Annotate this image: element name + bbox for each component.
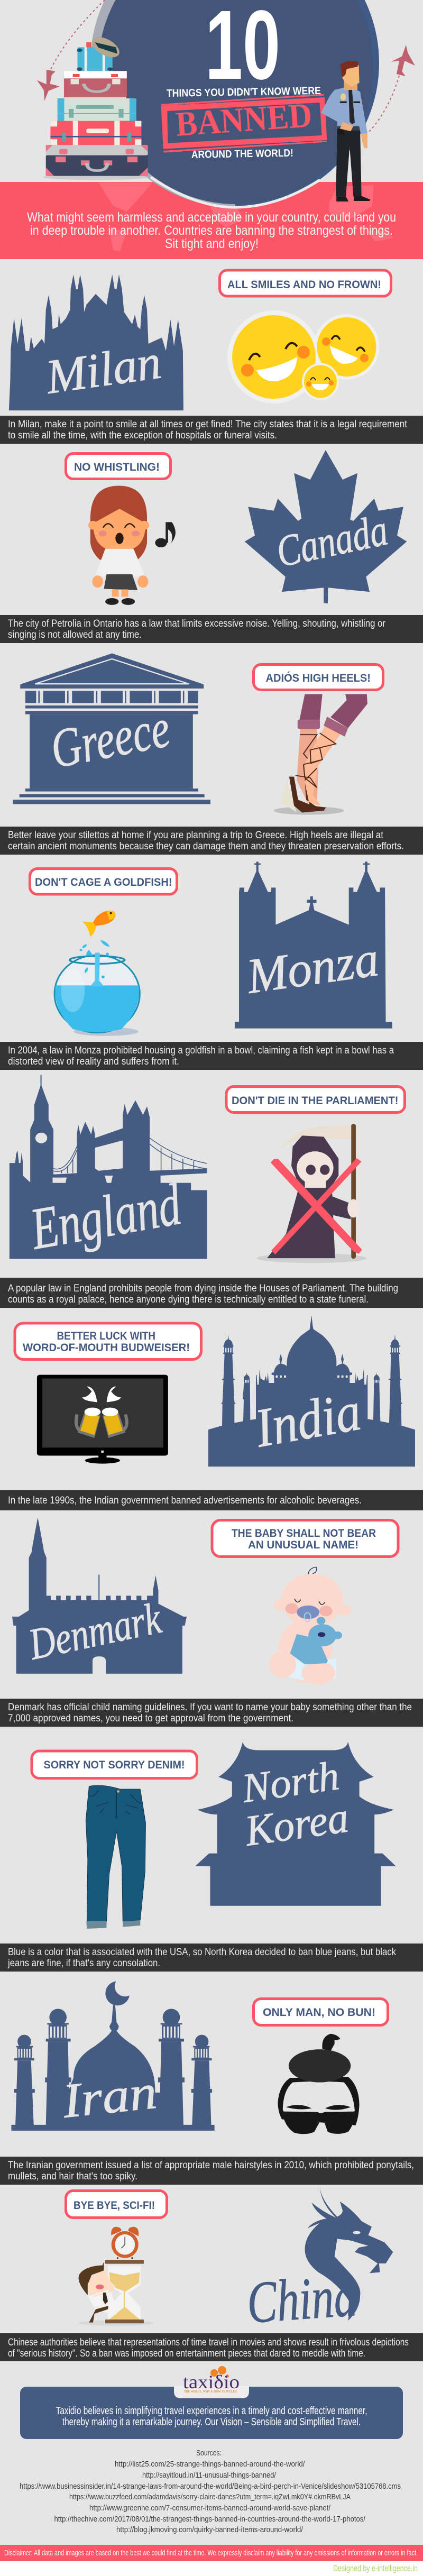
panel: Greece [0,653,423,855]
callout: DON'T CAGE A GOLDFISH! [35,876,172,888]
background circle [90,0,379,207]
silhouette: pagoda: Korea [242,1793,352,1855]
intro text: Sit tight and enjoy! [165,236,259,251]
silhouette: pagoda [195,1741,396,1906]
green suitcase [58,98,136,121]
callout [15,1323,201,1359]
caption bar: singing is not allowed at any time. [8,629,142,640]
about text [56,2405,367,2428]
mauve suitcase [64,71,127,98]
designer credit [0,2561,423,2576]
silhouette: Milan cathedral [9,274,183,410]
caption bar [0,2333,423,2361]
caption bar [0,827,423,855]
caption bar [0,1944,423,1972]
faint world map [98,182,392,251]
callout [32,1751,197,1778]
panel: England [0,1075,423,1308]
callout: SORRY NOT SORRY DENIM! [43,1759,185,1771]
callout: BYE BYE, SCI-FI! [73,2199,155,2212]
caption bar: Better leave your stilettos at home if you are planning a trip to Greece. High heels are illegal at [8,830,384,841]
silhouette: London skyline: England [25,1171,186,1262]
minarets [15,2060,34,2125]
silhouette: Greek temple: Greece [45,698,174,780]
silhouette: London skyline [10,1075,207,1262]
panel: header [0,0,423,259]
intro text [27,210,396,251]
callout: BETTER LUCK WITH [57,1330,155,1342]
panel: North Korea [0,1741,423,1972]
sources: http://list25.com/25-strange-things-banned-around-the-world/ [115,2460,305,2469]
caption bar: jeans are fine, if that's any consolation. [7,1958,160,1969]
icon: plane left [37,70,60,101]
caption bar: mullets, and hair that's too spiky. [8,2171,137,2182]
silhouette: pagoda: North [238,1752,342,1811]
icon: smileys [227,310,380,404]
sources: http://sayitloud.in/11-unusual-things-banned/ [142,2471,277,2480]
sources: https://www.buzzfeed.com/adamdavis/sorry-claire-danes?utm_term=.iqZwLmk0Y#.okmRBvLJA [69,2493,351,2501]
caption bar [0,615,423,643]
panel: Monza [0,861,423,1070]
panel: India [0,1315,423,1510]
panel: China [0,2187,423,2361]
callout [254,1999,388,2025]
caption bar: In the late 1990s, the Indian government banned advertisements for alcoholic beverages. [8,1495,362,1506]
silhouette: Copenhagen city hall [12,1518,187,1674]
silhouette: dragon [245,2187,393,2336]
callout [254,664,383,690]
panel: company about [20,2366,403,2439]
caption bar: distorted view of reality and suffers from it. [8,1056,179,1067]
logo tab [174,2386,249,2398]
panel: Iran [0,1982,423,2185]
alarm clock [111,2227,139,2259]
red suitcase [50,121,141,145]
silhouette: mosque: Iran [59,2065,159,2128]
callout: DON'T DIE IN THE PARLIAMENT! [232,1095,399,1107]
caption bar [0,2157,423,2185]
sources: Sources: [196,2449,222,2458]
callout: WORD-OF-MOUTH BUDWEISER! [23,1342,190,1354]
icon: TV with beer mugs [37,1375,168,1464]
red intro band [0,182,423,259]
teddy [290,1617,342,1664]
callout [212,1520,398,1557]
callout: ONLY MAN, NO BUN! [263,2006,375,2019]
callout [66,454,170,479]
flight path right [369,76,399,132]
blue suitcase [77,42,113,71]
silhouette: mosque [11,1982,215,2131]
sources [20,2449,401,2534]
caption bar [0,416,423,444]
icon: suitcases [43,34,149,180]
caption bar [0,1490,423,1510]
logo: taxidio: THE WHERE, WHY & HOW TRAVELER [184,2390,237,2394]
logo: taxidio: taxiδio [183,2371,240,2392]
icon: singing girl [88,485,176,605]
icon: blue jeans [86,1785,146,1929]
icon: high heels legs [274,694,367,815]
caption bar: The city of Petrolia in Ontario has a law that limits excessive noise. Yelling, shouting, whistling or [8,618,386,629]
silhouette: maple leaf [245,450,407,603]
silhouette: Monza church: Monza [243,931,382,1004]
title line: THINGS YOU DIDN'T KNOW WERE [167,85,321,99]
silhouette: dragon: China [245,2263,358,2336]
callout: NO WHISTLING! [74,461,160,473]
sources: http://www.greenne.com/7-consumer-items-banned-around-world-save-planet/ [89,2504,331,2513]
callout [66,2190,167,2218]
callout [220,270,391,296]
office man [79,2262,116,2323]
panel: Canada [0,450,423,643]
icon: goldfish bowl [54,911,140,1036]
sources: http://thechive.com/2017/08/01/the-strangest-things-banned-in-countries-around-the-world-17-photos/ [54,2515,366,2524]
callout [30,868,177,894]
music note [155,522,176,547]
silhouette: Milan cathedral: Milan [42,334,164,404]
caption bar [0,1699,423,1727]
hat [87,34,125,60]
callout: AN UNUSUAL NAME! [248,1539,358,1551]
icon: hourglass man with clock [78,2227,154,2326]
disclaimer bar [0,2545,423,2561]
caption bar: to smile all the time, with the exception of hospitals or funeral visits. [8,430,277,441]
silhouette: Greek temple [13,653,210,804]
caption bar [0,1042,423,1070]
silhouette: Taj Mahal: India [250,1381,365,1459]
subtitle line: AROUND THE WORLD! [191,148,293,161]
silhouette: maple leaf: Canada [272,506,392,577]
icon: policeman [321,61,370,201]
icon: grim reaper with red cross [257,1124,366,1263]
caption bar: 7,000 approved names, you need to get approval from the government. [8,1713,293,1724]
navy suitcase [46,145,148,176]
caption bar: counts as a royal palace, hence anyone dying there is technically entitled to a state funeral. [8,1294,369,1305]
icon: man bun with sunglasses [278,2034,360,2134]
icon: plane right [391,45,415,76]
panel: Denmark [0,1518,423,1727]
panel: Milan [0,270,423,444]
callout: THE BABY SHALL NOT BEAR [232,1527,376,1539]
callout: ALL SMILES AND NO FROWN! [227,279,381,291]
silhouette: Monza church [235,861,392,1029]
icon: baby with teddy [269,1567,351,1684]
banned stamp: BANNED [174,96,313,144]
caption bar [0,1278,423,1308]
callout [226,1086,405,1113]
silhouette: Copenhagen city hall: Denmark [24,1593,166,1670]
flight path left [50,0,105,71]
silhouette: Taj Mahal [208,1315,415,1466]
goldfish [82,911,115,937]
about text box [20,2387,403,2439]
callout: ADIÓS HIGH HEELS! [265,672,371,684]
sources: http://blog.jkmoving.com/quirky-banned-items-around-world/ [116,2526,304,2534]
